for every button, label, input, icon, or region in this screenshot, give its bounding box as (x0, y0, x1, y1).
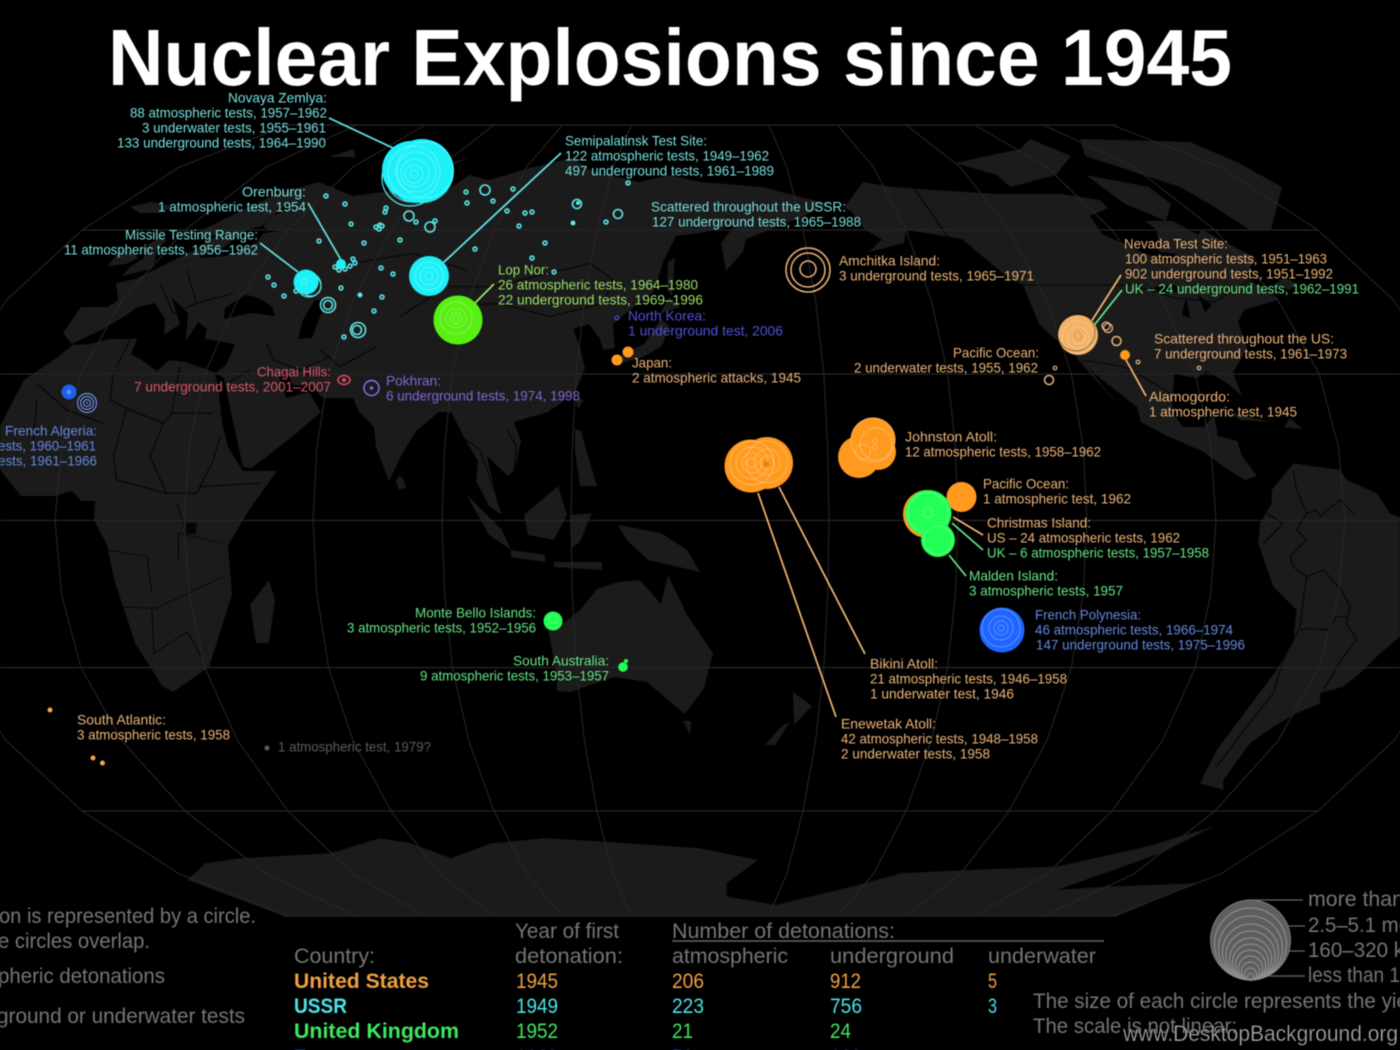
label: Pokhran: Pokhran: (386, 372, 441, 388)
label: Amchitka Island: Amchitka Island: (839, 252, 940, 268)
label: Pacific Ocean underwater: Pacific Ocean: (953, 344, 1039, 360)
Caspian Sea (298, 300, 326, 339)
label: Missile Testing Range: 11 atmospheric tests, 1956–1962 (64, 241, 258, 257)
legend: yield scale (1033, 888, 1400, 1038)
circles: South Atlantic (48, 708, 105, 766)
label: Bikini Atoll: Bikini Atoll: (870, 655, 938, 671)
Indonesia and New Guinea (466, 486, 700, 572)
circles: Amchitka Island (786, 248, 830, 292)
label: Pacific Ocean atmospheric: Pacific Ocean: (983, 475, 1069, 491)
label: Monte Bello Islands: Monte Bello Islands: (415, 604, 536, 620)
circles: Johnston Atoll (838, 418, 896, 478)
label: Johnston Atoll: 12 atmospheric tests, 1958–1962 (905, 443, 1101, 459)
Mediterranean Sea (72, 298, 235, 373)
row: United States: 206 (672, 970, 704, 993)
label: Scattered USSR (651, 198, 861, 229)
label: Lop Nor: 26 atmospheric tests, 1964–1980 (498, 276, 698, 292)
label: Novaya Zemlya: 88 atmospheric tests, 1957–1962 (130, 104, 327, 120)
table header: detonation: (515, 945, 623, 968)
label: Chagai Hills (134, 363, 331, 394)
label: Amchitka Island: 3 underground tests, 1965–1971 (839, 267, 1034, 283)
label: Nevada Test Site: Nevada Test Site: (1124, 235, 1228, 251)
label: Monte Bello Islands (347, 604, 536, 635)
label: Semipalatinsk (565, 132, 774, 178)
country borders (33, 253, 467, 533)
label: Novaya Zemlya: 133 underground tests, 1964–1990 (117, 134, 326, 150)
label: North Korea (628, 307, 783, 338)
label: French Algeria: French Algeria: (5, 422, 97, 438)
row: United Kingdom (294, 1020, 851, 1043)
Madagascar (250, 580, 275, 643)
Black Sea (224, 295, 275, 319)
label: Bikini Atoll (870, 655, 1067, 701)
circles: Novaya Zemlya (382, 139, 454, 206)
table header (294, 920, 1104, 968)
label: Pacific Ocean underwater: 2 underwater tests, 1955, 1962 (854, 359, 1038, 375)
label: French Algeria: ests, 1961–1966 (0, 452, 97, 468)
table header: underwater (988, 945, 1096, 968)
label: Pacific Ocean underwater (854, 344, 1039, 375)
label: French Algeria: ests, 1960–1961 (0, 437, 96, 453)
Americas borders (914, 188, 1250, 393)
label: Lop Nor: 22 underground tests, 1969–1996 (498, 291, 703, 307)
label: Johnston Atoll (905, 428, 1101, 459)
label: Japan: Japan: (632, 354, 672, 370)
table header: Country: (294, 945, 375, 968)
label: Scattered USSR: 127 underground tests, 1965–1988 (652, 213, 861, 229)
Australia and New Zealand (548, 575, 812, 745)
label: French Polynesia (1035, 606, 1245, 652)
circles: Semipalatinsk (409, 256, 449, 296)
circles: scattered USSR (266, 181, 630, 339)
table header: Year of first (515, 920, 619, 943)
label: Orenburg: Orenburg: (242, 183, 306, 199)
label: Japan: 2 atmospheric attacks, 1945 (632, 369, 801, 385)
label: Nevada Test Site (1124, 235, 1359, 296)
circles: French Polynesia (980, 608, 1024, 652)
label: Pokhran: 6 underground tests, 1974, 1998 (386, 387, 580, 403)
row: United States: United States (294, 970, 429, 993)
North America (839, 182, 1278, 480)
label: North Korea: 1 underground test, 2006 (628, 322, 783, 338)
label: Semipalatinsk: Semipalatinsk Test Site: (565, 132, 707, 148)
label: South Australia: 9 atmospheric tests, 1953–1957 (420, 667, 609, 683)
label: Japan (632, 354, 801, 385)
legend text: left explanation: pheric detonations (0, 965, 165, 988)
label: Christmas Island (987, 514, 1209, 560)
row: USSR (294, 995, 997, 1018)
legend text: left explanation: ground or underwater tests (0, 1005, 245, 1028)
label: Johnston Atoll: Johnston Atoll: (905, 428, 997, 444)
label: Novaya Zemlya (117, 89, 327, 150)
label: Amchitka Island (839, 252, 1034, 283)
label: French Polynesia: 46 atmospheric tests, 1966–1974 (1035, 621, 1233, 637)
legend: yield scale: The scale is not linear: (1033, 1015, 1237, 1038)
circles: French Algeria (62, 384, 96, 412)
label: Alamogordo: Alamogordo: (1149, 388, 1230, 404)
label: French Algeria (0, 422, 97, 468)
label: Malden Island: Malden Island: (969, 567, 1058, 583)
row: USSR: 1949 (516, 995, 558, 1018)
table header: atmospheric (672, 945, 788, 968)
circles: Orenburg (336, 259, 346, 269)
label: South Atlantic: South Atlantic: (77, 711, 166, 727)
label: South Australia (420, 652, 609, 683)
label: Scattered US: Scattered throughout the US: (1154, 330, 1334, 346)
label: Nevada Test Site: 100 atmospheric tests, 1951–1963 (1125, 250, 1327, 266)
label: Monte Bello Islands: 3 atmospheric tests, 1952–1956 (347, 619, 536, 635)
label: Bikini Atoll: 1 underwater test, 1946 (870, 685, 1014, 701)
label: Pokhran (386, 372, 580, 403)
row: France (294, 1046, 862, 1050)
label: North Korea: North Korea: (628, 307, 706, 323)
Caribbean islands (1229, 412, 1302, 429)
label: South Atlantic (77, 711, 230, 742)
label: Pacific Ocean atmospheric (983, 475, 1131, 506)
title: Nuclear Explosions since 1945 (108, 13, 1232, 102)
world map land masses (0, 139, 1400, 917)
Asia borders (400, 263, 613, 497)
label: Malden Island (969, 567, 1123, 598)
label: Lop Nor: Lop Nor: (498, 261, 549, 277)
label: Scattered US: 7 underground tests, 1961–1973 (1154, 345, 1347, 361)
label: South Atlantic: 3 atmospheric tests, 1958 (77, 726, 230, 742)
label: Orenburg (158, 183, 306, 214)
circles: Australia (544, 612, 628, 672)
table: detonations by country (294, 920, 1104, 1050)
label: Novaya Zemlya: Novaya Zemlya: (228, 89, 327, 105)
circle: 1979 event (264, 746, 270, 750)
label: 1979 event: 1 atmospheric test, 1979? (278, 738, 431, 754)
label: Alamogordo: 1 atmospheric test, 1945 (1149, 403, 1297, 419)
label: Chagai Hills: 7 underground tests, 2001–2007 (134, 378, 331, 394)
label: Enewetak Atoll: Enewetak Atoll: (841, 715, 936, 731)
row: United Kingdom: 24 (830, 1020, 851, 1043)
label: Scattered USSR: Scattered throughout the USSR: (651, 198, 846, 214)
label: French Polynesia: 147 underground tests, 1975–1996 (1036, 636, 1245, 652)
label: French Polynesia: French Polynesia: (1035, 606, 1141, 622)
label: Enewetak Atoll: 2 underwater tests, 1958 (841, 745, 990, 761)
label: South Australia: South Australia: (513, 652, 609, 668)
label: Enewetak Atoll: 42 atmospheric tests, 1948–1958 (841, 730, 1038, 746)
circles: Lop Nor (434, 296, 482, 344)
Baltic Sea (199, 205, 292, 258)
row: United States: 912 (830, 970, 861, 993)
label: Orenburg: 1 atmospheric test, 1954 (158, 198, 306, 214)
row: USSR: 3 (988, 995, 997, 1018)
row: USSR: 756 (830, 995, 862, 1018)
label: Enewetak Atoll (841, 715, 1038, 761)
map graticule (0, 125, 1400, 916)
table header: underground (830, 945, 954, 968)
Britain, Iceland, small islands of Eurasia (108, 149, 680, 490)
legend text: left explanation (0, 905, 256, 1028)
label: Alamogordo (1149, 388, 1297, 419)
row: United States (294, 970, 997, 993)
row: United Kingdom: 21 (672, 1020, 693, 1043)
label: Bikini Atoll: 21 atmospheric tests, 1946–1958 (870, 670, 1067, 686)
label: Nevada Test Site: 902 underground tests, 1951–1992 (1125, 265, 1333, 281)
circles: Pacific Ocean 1962 (946, 482, 976, 512)
Hudson Bay and Great Lakes (1090, 208, 1212, 318)
label: Missile Testing Range: Missile Testing Range: (125, 226, 258, 242)
table header: Number of detonations: (672, 920, 895, 943)
legend text: left explanation: e circles overlap. (0, 930, 150, 953)
label: Malden Island: 3 atmospheric tests, 1957 (969, 582, 1123, 598)
Arctic Canada and Greenland (955, 139, 1296, 290)
label: Christmas Island: UK – 6 atmospheric tests, 1957–1958 (987, 544, 1209, 560)
label: Christmas Island: Christmas Island: (987, 514, 1091, 530)
label: Novaya Zemlya: 3 underwater tests, 1955–1961 (142, 119, 326, 135)
circles: Christmas and Malden (903, 490, 955, 557)
label: Lop Nor (498, 261, 703, 307)
label: Semipalatinsk: 497 underground tests, 1961–1989 (565, 162, 774, 178)
label: Scattered US (1154, 330, 1347, 361)
row: USSR: USSR (294, 995, 347, 1018)
label: Missile Testing Range (64, 226, 258, 257)
Afro-Eurasia (0, 158, 829, 692)
row: USSR: 223 (672, 995, 704, 1018)
circles: Asia minor sites (338, 316, 634, 396)
label: Pacific Ocean atmospheric: 1 atmospheric test, 1962 (983, 490, 1131, 506)
circles: Nevada and US (1044, 313, 1201, 384)
label: Chagai Hills: Chagai Hills: (257, 363, 331, 379)
legend: yield scale: more than (1308, 888, 1400, 911)
Antarctica (107, 533, 1213, 917)
row: United States: 5 (988, 970, 997, 993)
label: Christmas Island: US – 24 atmospheric tests, 1962 (987, 529, 1180, 545)
row: United Kingdom: 1952 (516, 1020, 558, 1043)
legend text: left explanation: on is represented by a circle. (0, 905, 256, 928)
label: Nevada Test Site: UK – 24 underground tests, 1962–1991 (1125, 280, 1359, 296)
row: United States: 1945 (516, 970, 558, 993)
connector lines (260, 118, 1146, 717)
circles: Missile Testing Range (294, 270, 321, 297)
label: Semipalatinsk: 122 atmospheric tests, 1949–1962 (565, 147, 769, 163)
South America (1200, 463, 1400, 790)
row: United Kingdom: United Kingdom (294, 1020, 459, 1043)
circles: Bikini and Enewetak (724, 437, 793, 492)
